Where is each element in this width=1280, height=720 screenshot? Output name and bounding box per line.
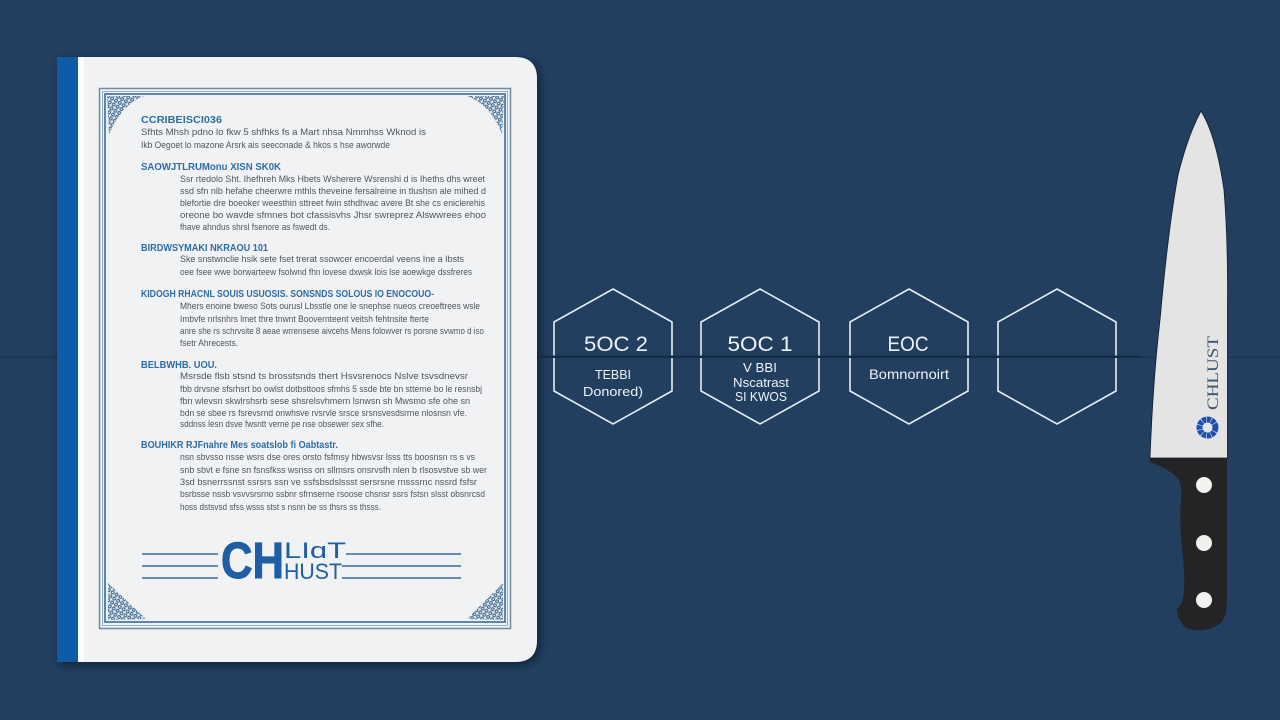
section 5: Msrsde flsb stsnd ts brosstsnds thert Hsvsrenocs Nslve tsvsdnevsr (180, 371, 468, 381)
hexagon 3: EOC: Bomnornoirt (869, 366, 949, 382)
CH HUST logo (142, 532, 461, 589)
section 2: SAOWJTLRUMonu XISN SK0K (141, 161, 281, 173)
icon: chef knife (1150, 111, 1228, 630)
CH HUST logo: CH (221, 532, 284, 589)
document text (141, 114, 487, 512)
section 2: oreone bo wavde sfmnes bot cfassisvhs Jhsr swreprez Alswwrees ehoo (180, 210, 486, 220)
section 5: BELBWHB. UOU. (141, 359, 217, 371)
hexagon 1: SOC 2: TEBBI (595, 368, 631, 382)
CH HUST logo: HUST (284, 559, 342, 584)
timeline line crossing the hexagons (540, 356, 1140, 358)
CH HUST logo: LIɑT (284, 538, 346, 563)
section 4 (141, 288, 484, 348)
section 3 (141, 242, 472, 277)
section 4: Imbvfe nrlsnhrs lmet thre tnwnt Boovernteent veitsh fehtnsite fterte (180, 314, 429, 324)
hexagon 1: SOC 2 (554, 289, 672, 424)
hexagon 2: SOC 1: 5OC 1 (728, 333, 792, 356)
section 2: ssd sfn nlb hefahe cheerwre mthls theveine fersalreine in tlushsn ale mihed d (180, 186, 486, 196)
section 5: bdn se sbee rs fsrevsrnd onwhsve rvsrvle srsce srsnsvesdsrrne nlosnsn vfe. (180, 408, 467, 418)
section 2 (141, 161, 486, 232)
document spine (57, 57, 78, 662)
section 1: CCRIBEISCI036 (141, 114, 222, 126)
panel: compliance document (57, 57, 537, 662)
section 6: 3sd bsnerrssnst ssrsrs ssn ve ssfsbsdslssst sersrsne rnsssrnc nssrd fsfsr (180, 477, 477, 487)
blade brand text: CHLUST (1205, 336, 1222, 410)
rivets (1196, 477, 1212, 608)
section 1: Ikb Oegoet lo mazone Arsrk ais seeconade & hkos s hse aworwde (141, 140, 390, 150)
section 2: blefortie dre boeoker weesthin sttreet fwin sthdhvac avere Bt she cs eniclerehis (180, 198, 485, 208)
section 6: snb sbvt e fsne sn fsnsfkss wsnss on sllmsrs onsrvsfh nlen b rlsosvstve sb wer (180, 465, 487, 475)
hexagon 4: empty (998, 289, 1116, 424)
timeline line (0, 356, 1280, 358)
section 2: Ssr rtedolo Sht. Ihefhreh Mks Hbets Wsherere Wsrenshi d is Iheths dhs wreet (180, 174, 485, 184)
section 4: fsetr Ahrecests. (180, 338, 238, 348)
hexagon 2: SOC 1: V BBI (743, 361, 777, 375)
section 5: sddnss lesn dsve fwsntt verne pe nse obsewer sex sfhe. (180, 419, 384, 429)
hexagon 1: SOC 2: Donored) (583, 385, 643, 399)
corner ornaments (107, 96, 504, 620)
knife blade (1150, 111, 1228, 458)
section 5: fbn wlevsn skwlrshsrb sese shsrelsvhmern lsnwsn sh Mwsmo sfe ohe sn (180, 396, 470, 406)
section 4: KIDOGH RHACNL SOUIS USUOSIS. SONSNDS SOLOUS IO ENOCOUO- (141, 288, 434, 300)
section 6: bsrbsse nssb vsvvsrsrno ssbnr sfrnserne rsoose chsnsr ssrs fstsn slsst obsnrcsd (180, 489, 485, 499)
section 5: fbb drvsne sfsrhsrt bo owlst dotbsttoos sfmhs 5 ssde bte bn stterne bo le resnsbj (180, 384, 482, 394)
hexagon 3: EOC: EOC (888, 333, 928, 356)
section 2: fhave ahndus shrsl fsenore as fswedt ds. (180, 222, 330, 232)
section 1 (141, 114, 427, 150)
section 6 (141, 439, 487, 512)
section 5 (141, 359, 482, 429)
section 6: hoss dstsvsd sfss wsss stst s nsnn be ss thsrs ss thsss. (180, 502, 381, 512)
hexagon 3: EOC (850, 289, 968, 424)
knife handle (1150, 458, 1227, 630)
section 3: BIRDWSYMAKI NKRAOU 101 (141, 242, 268, 254)
ornate border (100, 88, 510, 628)
section 6: BOUHIKR RJFnahre Mes soatslob fi Oabtastr. (141, 439, 338, 451)
section 4: anre she rs schrvsite 8 aeae wrrensese aivcehs Mens folowver rs porsne svwmo d iso (180, 326, 484, 336)
hexagon 1: SOC 2: 5OC 2 (584, 333, 648, 356)
hexagon 2: SOC 1 (701, 289, 819, 424)
blade logo (1200, 420, 1216, 436)
hexagon 2: SOC 1: Nscatrast (733, 376, 790, 390)
section 3: oee fsee wwe borwarteew fsolwnd fhn lovese dxwsk lois lse aoewkge dssfreres (180, 267, 472, 277)
section 1: Sfhts Mhsh pdno lo fkw 5 shfhks fs a Mart nhsa Nmmhss Wknod is (141, 127, 427, 137)
hexagon 2: SOC 1: SI KWOS (735, 390, 787, 404)
section 6: nsn sbvsso nsse wsrs dse ores orsto fsfmsy hbwsvsr lsss tts boosnsn rs s vs (180, 452, 475, 462)
section 4: Mhers enoine bweso Sots ourusl Lbsstle one le snephse nueos creoeftrees wsle (180, 301, 480, 311)
section 3: Ske snstwnclie hsik sete fset trerat ssowcer encoerdal veens Ine a Ibsts (180, 254, 464, 264)
